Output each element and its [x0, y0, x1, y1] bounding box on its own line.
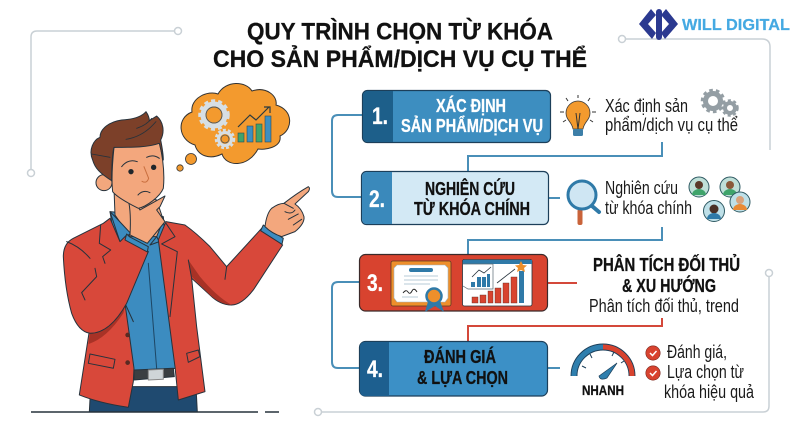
step 3 description: PHÂN TÍCH ĐỐI THỦ	[593, 254, 740, 275]
icon: speed gauge: NHANH	[582, 382, 624, 398]
logo: Will Digital	[639, 9, 790, 40]
step 2 description	[605, 178, 692, 218]
step 4 checklist	[646, 342, 755, 402]
step 4 panel: ĐÁNH GIÁ	[424, 346, 496, 367]
step 3 description	[589, 254, 740, 316]
connectors	[332, 115, 662, 368]
icon: grey gears	[702, 90, 738, 116]
icon: gears	[200, 101, 234, 148]
step 4 checklist: khóa hiệu quả	[664, 382, 755, 402]
step 3 description: & XU HƯỚNG	[622, 275, 716, 296]
icon: speed gauge	[571, 344, 635, 398]
title: CHO SẢN PHẨM/DỊCH VỤ CỤ THỂ	[213, 44, 587, 73]
left shoulder and forearm	[63, 218, 148, 333]
step 4 panel	[360, 342, 548, 396]
step 4 checklist: Lựa chọn từ	[667, 362, 744, 382]
right jacket panel and sleeve	[158, 222, 283, 400]
chart: trend panel	[462, 260, 532, 306]
step 1 description: Xác định sản	[605, 96, 688, 116]
step 1 description	[605, 96, 738, 135]
step 1 panel	[362, 90, 550, 142]
step 1 panel: SẢN PHẨM/DỊCH VỤ	[401, 115, 543, 136]
step 2 panel	[362, 172, 548, 224]
icon: certificate	[391, 261, 451, 312]
step 1 panel: XÁC ĐỊNH	[436, 95, 506, 116]
icon: people avatars	[689, 177, 750, 222]
logo: Will Digital: WILL DIGITAL	[682, 17, 790, 34]
icon: magnifier	[568, 181, 599, 225]
step 1 description: phẩm/dịch vụ cụ thể	[605, 115, 738, 135]
step 2 panel: TỪ KHÓA CHÍNH	[414, 198, 530, 219]
icon: light bulb	[560, 95, 596, 136]
step 2 panel: NGHIÊN CỨU	[425, 178, 515, 199]
thought bubble	[177, 83, 290, 171]
title	[213, 18, 587, 73]
step 3 panel: 3.	[367, 270, 383, 297]
step 2 description: từ khóa chính	[605, 198, 692, 218]
ground line	[31, 411, 279, 413]
step 3 description: Phân tích đối thủ, trend	[589, 296, 739, 316]
character: thinking man pointing	[63, 112, 309, 412]
left jacket panel	[79, 293, 134, 407]
step 4 checklist: Đánh giá,	[667, 342, 727, 362]
step 2 panel: 2.	[369, 186, 385, 213]
icon: growth chart	[238, 107, 271, 142]
step 4 panel: & LỰA CHỌN	[417, 368, 508, 388]
title: QUY TRÌNH CHỌN TỪ KHÓA	[247, 18, 553, 46]
step 2 description: Nghiên cứu	[605, 178, 678, 198]
step 1 panel: 1.	[372, 103, 388, 130]
step 3 panel	[360, 254, 548, 312]
step 4 panel: 4.	[367, 356, 383, 383]
